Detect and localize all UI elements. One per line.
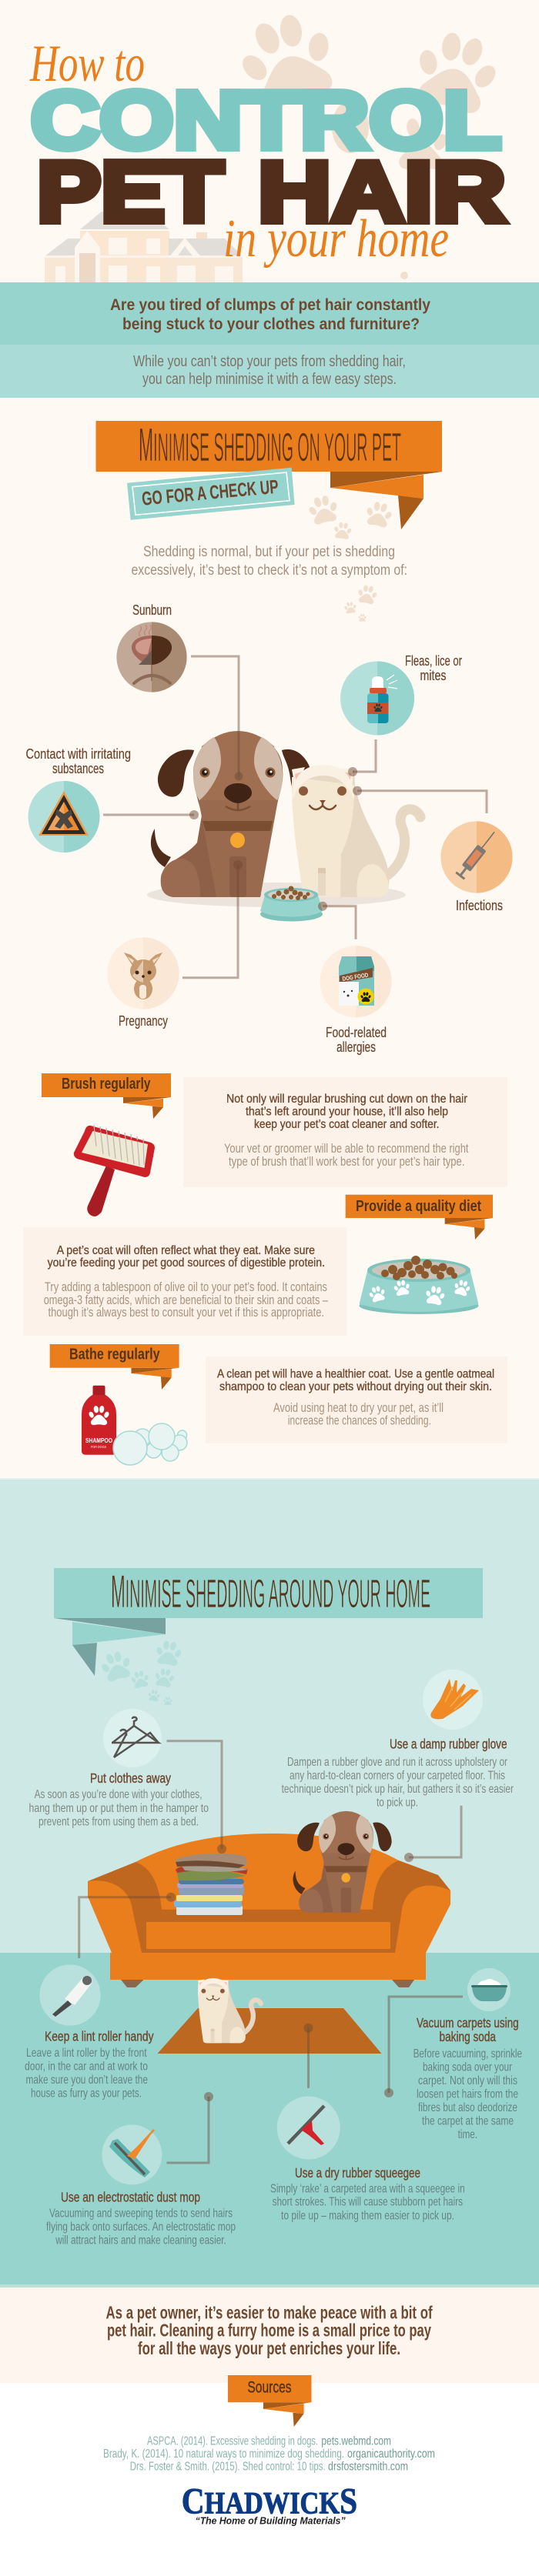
sources list: ASPCA. (2014). Excessive shedding in dogs. (147, 2435, 318, 2448)
ribbon: brush regularly (42, 1073, 171, 1119)
icon: rubber glove (423, 1670, 483, 1730)
sources list: Drs. Foster & Smith. (2015). Shed control: 10 tips. (130, 2460, 326, 2473)
ribbon: brush regularly: Brush regularly (62, 1076, 151, 1093)
label: contact with irritating substances (26, 746, 131, 776)
tag: go for a check up: GO FOR A CHECK UP (141, 476, 280, 510)
panel: brush text: that’s left around your house, it’ll also help (246, 1105, 448, 1119)
icon: lint roller (39, 1964, 101, 2026)
panel: diet text: A pet’s coat will often reflect what they eat. Make sure (57, 1244, 315, 1257)
paw prints under banner (98, 1639, 184, 1705)
text: dry rubber squeegee: Use a dry rubber squeegee (295, 2165, 420, 2181)
text: put clothes away: Put clothes away (90, 1770, 171, 1786)
connector: soda (389, 1997, 463, 2093)
paw prints near banner (306, 493, 395, 622)
text: put clothes away: prevent pets from using them as a bed. (38, 1816, 199, 1829)
label: food allergies (326, 1025, 387, 1055)
text: electrostatic dust mop: flying back onto surfaces. An electrostatic mop (46, 2221, 236, 2234)
text: dry rubber squeegee (270, 2165, 465, 2222)
header paw prints (228, 3, 507, 279)
intro text: check up (131, 543, 407, 579)
closing message (106, 2302, 433, 2358)
ribbon: provide a quality diet (346, 1195, 493, 1240)
food bowl (260, 886, 323, 922)
closing message: As a pet owner, it’s easier to make peace with a bit of (106, 2302, 433, 2322)
panel: bathe text: Avoid using heat to dry your pet, as it’ll (273, 1401, 444, 1415)
icon: hanger (103, 1709, 162, 1767)
text: vacuum carpets (413, 2015, 522, 2141)
ribbon: bathe regularly (50, 1344, 179, 1390)
text: keep a lint roller handy: house as furry as your pets. (31, 2087, 142, 2101)
text: dry rubber squeegee: short strokes. This will cause stubborn pet hairs (273, 2196, 463, 2209)
connector: mop (166, 2097, 209, 2163)
title: in your home (223, 209, 449, 269)
text: keep a lint roller handy (25, 2029, 154, 2101)
ribbon: bathe regularly: Bathe regularly (69, 1346, 160, 1363)
cat on rug (198, 1978, 261, 2043)
panel: diet text: omega-3 fatty acids, which are beneficial to their skin and coats – (44, 1293, 329, 1307)
text: put clothes away: hang them up or put them in the hamper to (29, 1802, 209, 1815)
text: electrostatic dust mop: will attract hairs and make cleaning easier. (55, 2234, 226, 2247)
title: CONTROL (31, 75, 501, 166)
connector: lint (79, 1897, 171, 1958)
clothes stack (174, 1854, 249, 1915)
panel: diet text: Try adding a tablespoon of olive oil to your pet’s food. It contains (45, 1280, 327, 1294)
icon: fleas spray (340, 662, 414, 736)
sources list: drsfostersmith.com (328, 2460, 408, 2473)
icon: squeegee (277, 2096, 340, 2159)
text: use a damp rubber glove (282, 1737, 514, 1810)
section banner: minimise shedding on your pet (95, 419, 442, 529)
sources list: organicauthority.com (347, 2448, 435, 2461)
title: How to (29, 34, 145, 92)
intro band: reassurance (0, 345, 539, 398)
label: fleas (405, 653, 462, 683)
title: PET (37, 145, 223, 240)
section background: around your home (0, 1478, 539, 2576)
sources list: Brady, K. (2014). 10 natural ways to minimize dog shedding. (103, 2448, 344, 2461)
connector: clothes (166, 1741, 222, 1849)
text: vacuum carpets: baking soda (439, 2029, 496, 2044)
ribbon: sources: Sources (247, 2378, 292, 2396)
house illustration (45, 212, 243, 282)
panel: brush text: Your vet or groomer will be able to recommend the right (224, 1142, 469, 1156)
panel: brush text: keep your pet’s coat cleaner and softer. (254, 1118, 439, 1131)
label: fleas: Fleas, lice or (405, 653, 462, 669)
connector: contact (103, 814, 194, 816)
title (29, 34, 506, 269)
cat illustration (292, 765, 420, 897)
intro band: question (0, 282, 539, 345)
section banner: minimise shedding around your home (54, 1566, 483, 1676)
intro band: reassurance: While you can’t stop your pets from shedding hair, (133, 353, 406, 370)
dog illustration (151, 731, 313, 897)
label: contact with irritating substances: substances (52, 761, 104, 776)
panel: diet text (23, 1227, 346, 1336)
icon: shampoo and bubbles: FOR DOGS (91, 1445, 106, 1449)
label: food allergies: Food-related (326, 1025, 387, 1040)
panel: brush text (183, 1077, 507, 1187)
icon: shampoo and bubbles: SHAMPOO (85, 1437, 112, 1444)
text: dry rubber squeegee: Simply ‘rake’ a carpeted area with a squeegee in (270, 2182, 465, 2195)
text: keep a lint roller handy: make sure you don’t leave the (26, 2074, 148, 2087)
text: keep a lint roller handy: Keep a lint roller handy (45, 2029, 154, 2044)
icon: irritant warning (28, 781, 100, 853)
panel: brush text: Not only will regular brushing cut down on the hair (226, 1093, 468, 1106)
ribbon: provide a quality diet: Provide a quality diet (356, 1198, 481, 1215)
intro band: reassurance: you can help minimise it with a few easy steps. (142, 371, 397, 388)
panel: bathe text: shampoo to clean your pets without drying out their skin. (219, 1380, 492, 1393)
text: use a damp rubber glove: to pick up. (377, 1797, 418, 1810)
text: electrostatic dust mop (46, 2190, 236, 2247)
connector: glove (409, 1806, 461, 1857)
intro text: check up: excessively, it’s best to check it’s not a symptom of: (131, 562, 407, 579)
ribbon: sources (228, 2375, 311, 2427)
icon: brush (74, 1125, 155, 1216)
closing message: for all the ways your pet enriches your life. (138, 2338, 400, 2358)
text: electrostatic dust mop: Vacuuming and sweeping tends to send hairs (49, 2207, 233, 2221)
icon: sunburn (116, 622, 187, 692)
panel: brush text: type of brush that’ll work best for your pet’s hair type. (229, 1155, 465, 1169)
icon: food bowl with paws (359, 1256, 479, 1314)
panel: bathe text (206, 1356, 507, 1443)
sources list: pets.webmd.com (321, 2435, 391, 2448)
icon: infections syringe (440, 821, 513, 893)
label: pregnancy: Pregnancy (119, 1013, 168, 1029)
sofa (88, 1834, 450, 1987)
text: keep a lint roller handy: door, in the car and at work to (25, 2060, 148, 2074)
connector: infections (357, 791, 487, 813)
text: use a damp rubber glove: Use a damp rubber glove (390, 1737, 507, 1752)
dog on sofa (293, 1811, 392, 1913)
logo: chadwicks: “The Home of Building Materials” (196, 2515, 346, 2527)
intro text: check up: Shedding is normal, but if your pet is shedding (143, 543, 395, 560)
text: put clothes away (29, 1770, 209, 1829)
icon: pregnancy chihuahua (107, 937, 179, 1009)
panel: bathe text: A clean pet will have a healthier coat. Use a gentle oatmeal (217, 1368, 494, 1381)
connector dots (189, 767, 362, 911)
text: dry rubber squeegee: to pile up – making them easier to pick up. (281, 2209, 454, 2222)
ground shadow (147, 883, 406, 907)
text: keep a lint roller handy: Leave a lint roller by the front (26, 2047, 147, 2060)
icon: food allergies bag: DOG FOOD (342, 972, 369, 983)
intro band: question: Are you tired of clumps of pet hair constantly (110, 296, 430, 314)
label: contact with irritating substances: Contact with irritating (26, 746, 131, 762)
label: food allergies: allergies (336, 1039, 376, 1055)
panel: diet text: you’re feeding your pet good sources of digestible protein. (48, 1256, 325, 1270)
label: infections: Infections (456, 898, 503, 913)
sources list (103, 2435, 435, 2473)
panel: diet text: though it’s always best to consult your vet if this is appropriate. (48, 1306, 324, 1320)
text: electrostatic dust mop: Use an electrostatic dust mop (61, 2190, 200, 2205)
logo: chadwicks: CHADWICKS (182, 2481, 357, 2522)
connector: fleas (353, 739, 376, 772)
title: HAIR (258, 145, 506, 240)
text: put clothes away: As soon as you’re done with your clothes, (35, 1788, 202, 1801)
icon: food allergies bag (320, 946, 392, 1017)
connector: food (323, 906, 356, 939)
icon: baking soda bowl (467, 1968, 511, 2011)
connector: pregnancy (182, 865, 238, 978)
intro band: question: being stuck to your clothes and furniture? (122, 315, 420, 333)
connector dots on home scene (166, 1844, 413, 2101)
text: vacuum carpets: time. (458, 2128, 477, 2141)
connector: sunburn (191, 656, 239, 777)
panel: bathe text: increase the chances of shedding. (288, 1414, 431, 1428)
tag: go for a check up (127, 468, 295, 520)
icon: shampoo and bubbles (82, 1386, 187, 1465)
label: fleas: mites (420, 668, 447, 683)
label: sunburn: Sunburn (132, 602, 172, 618)
connector: squeegee (307, 2028, 310, 2088)
icon: dust mop (102, 2125, 162, 2185)
rug (157, 2008, 382, 2054)
